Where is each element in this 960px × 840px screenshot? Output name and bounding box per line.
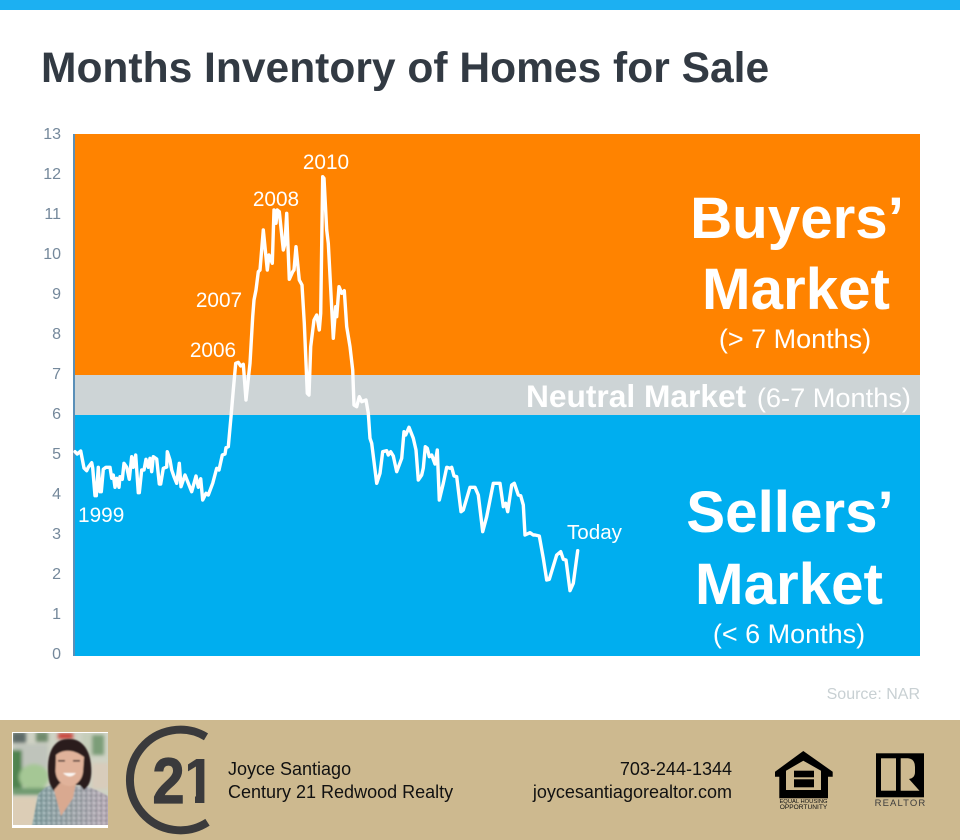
icon: equal housing opportunity: EQUAL HOUSING: [779, 799, 828, 805]
buyers market label: Buyers’: [690, 186, 904, 251]
y axis line: [73, 134, 75, 656]
agent name and company: Century 21 Redwood Realty: [228, 782, 453, 802]
band: buyers market: [75, 134, 920, 375]
y axis labels: 1: [52, 606, 61, 623]
sellers market label: (< 6 Months): [713, 619, 865, 649]
title: Months Inventory of Homes for Sale: [41, 44, 769, 92]
contact details: joycesantiagorealtor.com: [532, 782, 732, 802]
icon: realtor mark: [875, 753, 926, 809]
year labels: 1999: [78, 504, 124, 527]
century 21 logo: 2: [152, 745, 185, 817]
sellers market label: Market: [695, 552, 883, 617]
y axis labels: 8: [52, 326, 61, 343]
y axis labels: 11: [44, 206, 61, 223]
agent photo: [11, 732, 109, 828]
y axis labels: 6: [52, 406, 61, 423]
year labels: 2008: [253, 188, 299, 211]
y axis labels: 2: [52, 566, 61, 583]
contact details: [532, 759, 732, 802]
year labels: 2007: [196, 289, 242, 312]
top accent bar: [0, 0, 960, 10]
y axis labels: [43, 126, 61, 663]
year labels: Today: [567, 521, 623, 544]
year labels: 2006: [190, 339, 236, 362]
sellers market label: [686, 480, 894, 649]
y axis labels: 5: [52, 446, 61, 463]
footer band: [0, 720, 960, 840]
neutral market label: Neutral Market: [526, 378, 747, 414]
band: neutral market: [75, 375, 920, 415]
y axis labels: 0: [52, 646, 61, 663]
icon: realtor mark: REALTOR: [875, 798, 926, 809]
buyers market label: Market: [702, 257, 890, 322]
icon: equal housing opportunity: OPPORTUNITY: [780, 804, 828, 811]
agent name and company: [228, 759, 453, 802]
contact details: 703-244-1344: [620, 759, 732, 779]
icon: equal housing opportunity: [775, 751, 833, 811]
y axis labels: 12: [43, 166, 61, 183]
agent name and company: Joyce Santiago: [228, 759, 351, 779]
band: sellers market: [75, 415, 920, 656]
buyers market label: (> 7 Months): [719, 324, 871, 354]
y axis labels: 10: [43, 246, 61, 263]
y axis labels: 4: [52, 486, 61, 503]
year labels: 2010: [303, 151, 349, 174]
century 21 logo: 1: [181, 745, 217, 817]
century 21 logo: [130, 730, 217, 830]
sellers market label: Sellers’: [686, 480, 894, 545]
source note: Source: NAR: [827, 686, 920, 703]
inventory line: [75, 177, 578, 591]
chart: months inventory bands and line: [73, 134, 920, 656]
buyers market label: [690, 186, 904, 354]
neutral market label: [526, 378, 911, 414]
neutral market label: (6-7 Months): [757, 382, 911, 413]
y axis labels: 3: [52, 526, 61, 543]
y axis labels: 7: [52, 366, 61, 383]
y axis labels: 13: [43, 126, 61, 143]
y axis labels: 9: [52, 286, 61, 303]
year labels: [78, 151, 623, 544]
